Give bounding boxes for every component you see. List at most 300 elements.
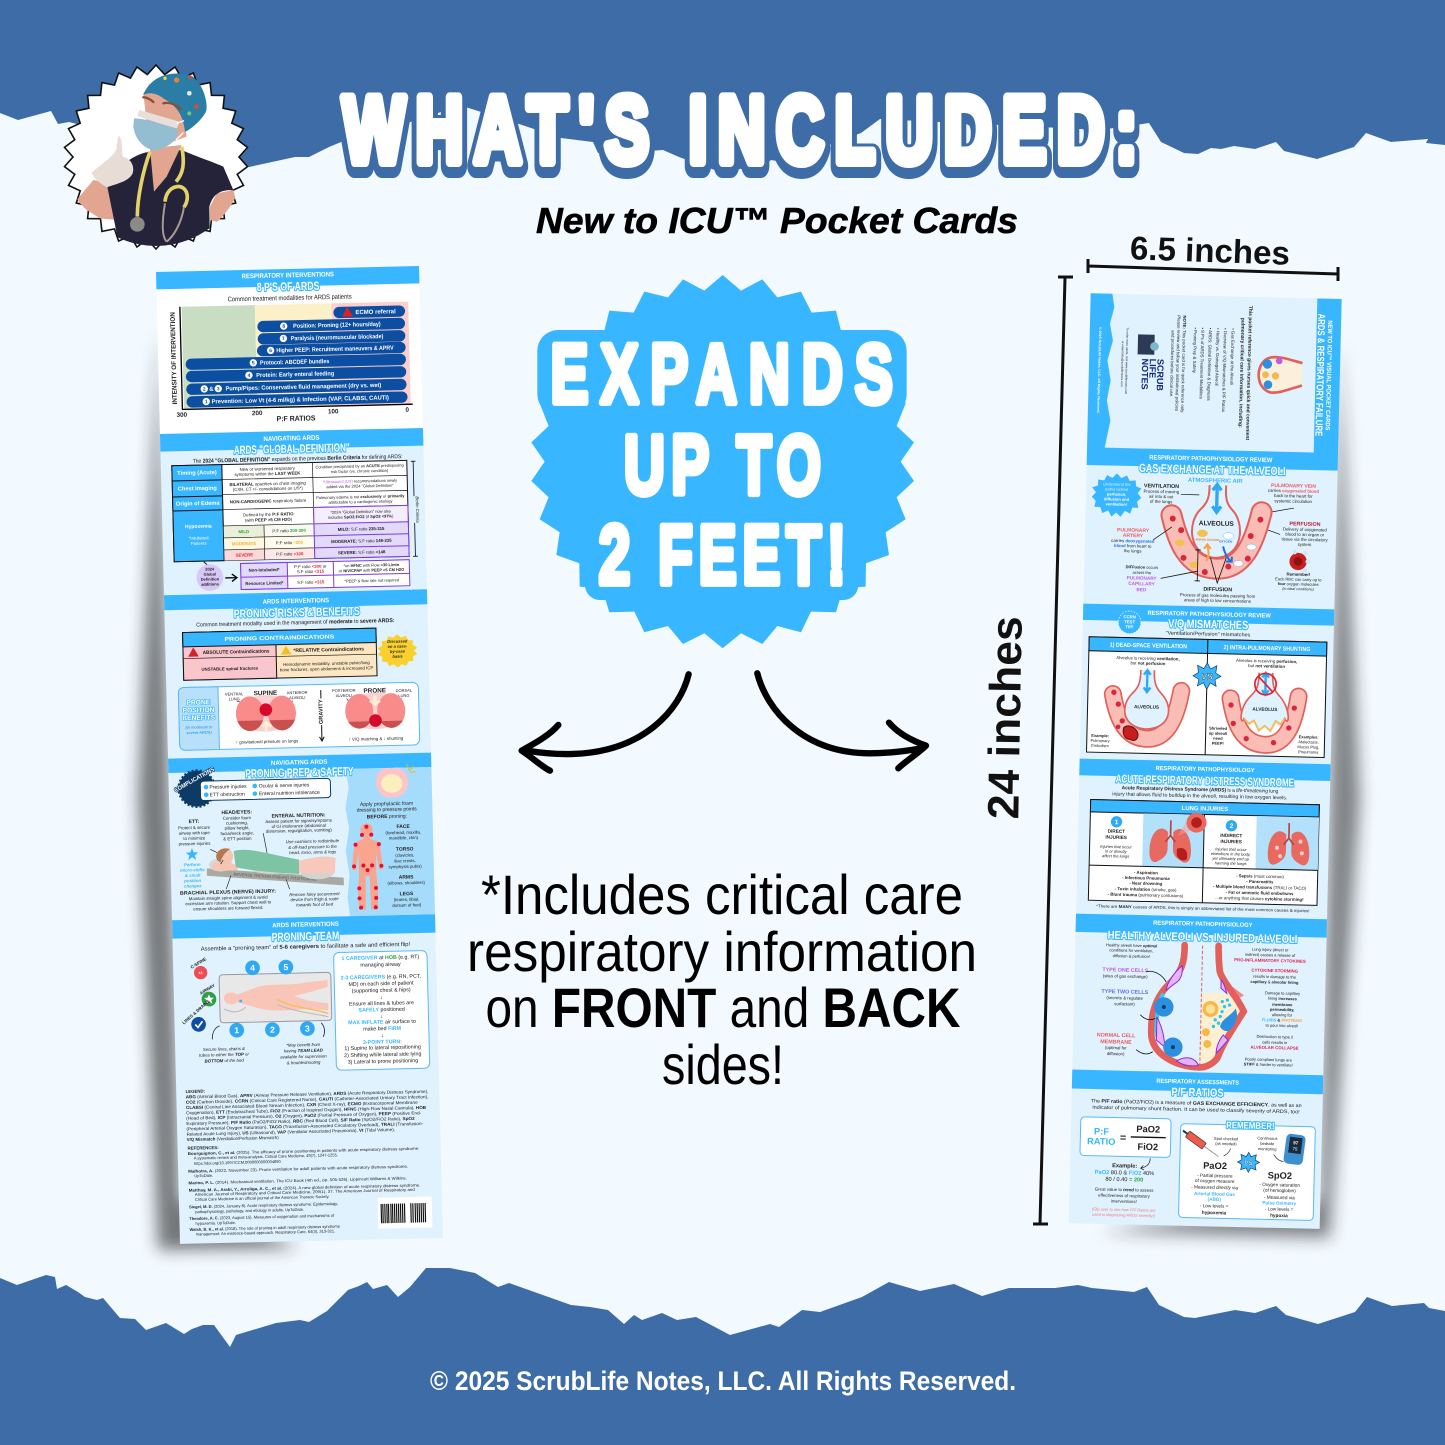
panel: proning prep and safety: ENTERAL NUTRITION: [272,812,326,820]
panel: V/Q mismatches: ALVEOLUS [1134,704,1159,710]
panel: proning prep and safety: Ocular & nerve injuries [259,782,310,790]
panel: ARDS global definition [160,428,427,592]
references text: Siegel, M. D. (2024, January 8). Acute respiratory distress syndrome: Epidemiology, [189,1201,338,1209]
panel: cover: NOTES [1139,358,1150,390]
torn blue footer background [0,1268,1445,1445]
panel: P/F ratios: REMEMBER! [1226,1120,1275,1131]
panel: P/F ratios: Continuous [1257,1135,1278,1141]
panel: healthy vs injured alveoli: conditions for ventilation, [1109,947,1154,953]
panel: proning risks and benefits: PRONING CONTRAINDICATIONS [224,634,335,643]
panel: healthy vs injured alveoli: Poorly compliant lungs are [1245,1056,1293,1063]
panel: V/Q mismatches: "Ventilation/Perfusion" mismatches [1166,630,1251,638]
panel: acute respiratory distress syndrome: - Toxin inhalation (smoke, gas) [1115,886,1177,893]
panel: proning team: 2 [270,1025,275,1035]
panel: V/Q mismatches: Alveolus is receiving ventilation, [1116,655,1180,661]
references text: Matthay, M. A., Arabi, Y., Arroliga, A. C., et al. (2024). A new global definition of acute respiratory distress syndrome. [189,1182,420,1193]
panel: proning team: managing airway [360,962,401,969]
panel: proning prep and safety: REVERSE TRENDELENBURG POSITIONING [233,872,317,882]
panel: V/Q mismatches: Embolism [1091,743,1109,748]
panel: P/F ratios: (as needed) [1215,1141,1237,1146]
panel: P/F ratios: 75 [1292,1146,1298,1152]
panel: proning prep and safety: mandible, chin) [389,835,419,841]
panel: P/F ratios: Great value to trend to assess [1095,1186,1154,1193]
panel: 8 P's of ARDS: Pump/Pipes: Conservative fluid management (dry vs. wet) [226,383,381,392]
panel: ARDS global definition: (with PEEP >5 CM H2O) [245,517,293,523]
panel: 8 P's of ARDS: 6 [269,348,272,354]
panel: proning team: & troubleshooting [287,1060,321,1065]
panel: healthy vs injured alveoli: lining increases [1268,996,1298,1001]
panel: gas exchange at the alveoli: DIFFusion occurs [1126,564,1158,570]
references text: Marino, P. L. (2014). Mechanical ventilation. The ICU Book (4th ed., pp. 505-526). Lippincott Williams & Wilkins. [188,1175,407,1185]
panel: gas exchange at the alveoli: RESPIRATORY PATHOPHYSIOLOGY REVIEW [1149,454,1272,464]
panel: acute respiratory distress syndrome: injury that allows fluid to buildup in the alveoli, resulting in low oxygen levels. [1112,791,1287,801]
callout: critical care information: respiratory information [467,920,977,983]
panel: proning risks and benefits: on a case- [387,643,408,649]
panel: cover: © 2025 ScrubLife Notes, LLC. All Rights Reserved. [1096,327,1102,414]
panel: acute respiratory distress syndrome: 1 [1115,819,1119,826]
panel: proning team: SAFELY positioned [358,1007,405,1014]
panel: acute respiratory distress syndrome [1076,759,1331,914]
panel: proning risks and benefits: ARDS INTERVENTIONS [263,597,329,606]
panel: ARDS global definition: *PEEP & flow rate not required [344,577,399,584]
barcode [378,1196,432,1229]
panel: proning prep and safety: FACE [396,824,411,830]
panel: ARDS global definition: Global [204,571,216,577]
panel: gas exchange at the alveoli: PULMONARY [1117,527,1150,534]
panel: V/Q mismatches [1080,604,1334,758]
panel: 8 P's of ARDS: 100 [328,408,339,415]
panel: gas exchange at the alveoli: ventilation! [1106,501,1127,507]
panel: proning team: 2) Shifting while lateral side lying [344,1051,422,1059]
panel: gas exchange at the alveoli [1089,453,1330,605]
panel: gas exchange at the alveoli: tissue via the circulatory [1281,536,1329,542]
panel: ARDS global definition: P:F ratio <200 [276,540,304,545]
panel: ARDS global definition: 2024 [205,566,215,572]
panel: gas exchange at the alveoli: areas of high to low concentrations [1184,597,1251,604]
panel: V/Q mismatches: VS [1201,671,1213,682]
panel: healthy vs injured alveoli: MEMBRANE [1100,1039,1132,1046]
panel: proning prep and safety: head, torso, arms & legs [289,849,337,855]
dimension: 24 inches: 24 inches [979,616,1032,820]
dimension: 6.5 inches [1088,229,1338,281]
panel: gas exchange at the alveoli: diffusion and [1104,496,1130,502]
panel: acute respiratory distress syndrome: INJURIES [1105,835,1127,840]
panel: ARDS global definition: The 2024 "GLOBAL DEFINITION" expands on the previous Berlin Criteria for defining ARDS: [193,454,403,465]
panel: ARDS global definition: P:F ratio <300 or [294,564,327,569]
panel: proning team: 3) Lateral to prone positioning [348,1058,418,1066]
panel: proning prep and safety: excessive arm rotation. Support chest wall to [185,899,272,906]
panel: P/F ratios: (Flip over to see how P/F Ratios are [1092,1206,1156,1213]
panel: ARDS global definition: P:F ratio <100 [276,551,304,557]
panel: healthy vs injured alveoli: capillary & alveolar lining [1250,979,1299,985]
panel: healthy vs injured alveoli: allowing for [1272,1012,1293,1018]
panel: proning prep and safety: (clavicles, [395,852,414,858]
legend text: (Peripheral Arterial Oxygen Saturation), TACO (Transfusion-Associated Circulatory Overload), TRALI (Transfusion- [186,1121,424,1131]
panel: proning team: 1 CAREGIVER at HOB (e.g. RT) [341,954,420,962]
panel: P/F ratios: FiO2 [1137,1142,1158,1152]
panel: proning prep and safety: Remove foley securement [289,891,340,897]
references text: Theodore, A. C. (2023, August 15). Measures of oxygenation and mechanisms of [189,1213,335,1221]
panel: 8 P's of ARDS: 8 [282,324,285,330]
panel: gas exchange at the alveoli: ATMOSPHERIC AIR [1188,478,1243,485]
panel: proning team: ↓ [380,1014,383,1020]
panel: P/F ratios: (of hemoglobin) [1263,1188,1296,1193]
panel: V/Q mismatches: TIP! [1125,624,1134,629]
panel: ARDS global definition: NON-CARDIOGENIC respiratory failure [230,498,307,504]
panel: proning risks and benefits: ALVEOLI [289,695,305,700]
panel: proning prep and safety: iliac crests, [394,858,416,864]
panel: healthy vs injured alveoli: membrane [1272,1002,1293,1007]
panel: V/Q mismatches: ALVEOLUS [1252,707,1277,712]
panel: proning prep and safety: LEGS [400,891,414,897]
panel: P/F ratios: SpO2 [1268,1170,1292,1181]
panel: proning team: LINES & DRAINS [181,998,211,1025]
panel: P/F ratios: interventions! [1111,1198,1137,1204]
panel: proning team: having TEAM LEAD [284,1048,323,1053]
panel: P/F ratios: - Measured directly via [1191,1184,1238,1190]
panel: healthy vs injured alveoli: to pour into alveoli [1265,1023,1298,1028]
legend text: CLABSI (Central Line Associated Blood Stream Infection), CXR (Chest X-ray), ECMO (Extracorporeal Membrane [186,1100,418,1110]
panel: P/F ratios: - Oxygen saturation [1259,1182,1300,1188]
panel: ARDS global definition: Timing (Acute) [177,470,217,477]
panel: proning prep and safety: Consider foam [223,815,251,821]
references text [188,1140,421,1237]
panel: gas exchange at the alveoli: VENTILATION [1144,483,1179,490]
title: WHAT'S INCLUDED: [343,79,1137,183]
panel: cover: or email hello@scrublifenotes.com [1120,341,1125,387]
panel: P/F ratios [1069,1070,1323,1222]
panel: V/Q mismatches: but not ventilation [1248,663,1285,669]
panel: P/F ratios: = [1120,1132,1126,1144]
panel: P/F ratios: bedside [1260,1141,1275,1146]
callout: critical care information: on FRONT and BACK [486,976,960,1039]
panel: 8 P's of ARDS: 200 [252,410,263,417]
panel: P/F ratios: - Partial pressure [1197,1173,1233,1179]
panel: cover: • 8 P's of ARDS Treatment Modalities [1199,327,1205,399]
panel: acute respiratory distress syndrome: - Infectious Pneumonia [1122,875,1170,881]
panel: proning risks and benefits: ANTERIOR [287,690,308,695]
references text: Malhotra, A. (2022, November 23). Prone ventilation for adult patients with acute respiratory distress syndrome. [188,1164,408,1174]
panel: gas exchange at the alveoli: systemic circulation [1274,498,1313,504]
panel: 8 P's of ARDS: & [209,387,214,393]
panel: proning prep and safety: Apply prophylactic foam [360,801,413,808]
panel: proning team: 3-POINT TURN: [363,1039,402,1046]
references text: pathophysiology, pathology, and etiology in adults. UpToDate. [195,1207,304,1214]
panel: P/F ratios: 80 / 0.40 = 200 [1105,1177,1143,1184]
panel: V/Q mismatches: CCRN [1123,614,1136,619]
panel: P/F ratios: hypoxemia [1202,1210,1227,1215]
panel: healthy vs injured alveoli: Destruction to type 2 [1256,1034,1294,1040]
panel: ARDS global definition: SEVERE [236,552,253,558]
panel: proning team: PRONING TEAM [271,929,339,944]
panel: 8 P's of ARDS: 2 [203,387,206,393]
panel: 8 P's of ARDS: Prevention: Low Vt (4-6 ml/kg) & Infection (VAP, CLABSI, CAUTI) [212,395,389,405]
panel: proning team: MAX INFLATE air surface to [348,1019,416,1026]
panel: proning team: (supporting chest & hips) [352,987,411,995]
panel: proning team: 1) Supine to lateral repositioning [344,1044,421,1052]
panel: cover [1087,293,1342,471]
legend text [186,1084,429,1142]
panel: cover: • ARDS: Global Definition & Diagnosis [1206,328,1213,401]
panel: gas exchange at the alveoli: the lungs [1124,548,1141,554]
panel: proning team: ↓ [381,1033,384,1039]
panel: proning team [172,914,443,1237]
panel: healthy vs injured alveoli: FLUIDS & PROTEINS [1262,1017,1302,1023]
panel: healthy vs injured alveoli: indirect) causes a release of [1245,952,1296,958]
panel: proning team: 2-3 CAREGIVERS (e.g. RN, PCT, [341,974,421,981]
legend text: CO2 (Carbon Dioxide), CCRN (Critical Care Registered Nurse), CAUTI (Catheter-Associated Urinary Tract Infection), [186,1094,429,1105]
panel: proning prep and safety: BEFORE proning: [367,814,407,820]
panel: V/Q mismatches: Pulmonary [1090,738,1110,743]
panel: proning team: +/- [198,970,204,975]
panel: proning prep and safety: Use cushions to redistribute [286,838,340,844]
panel: V/Q mismatches: but not perfusion [1130,660,1166,666]
panel: 8 P's of ARDS: Protocol: ABCDEF bundles [260,359,330,367]
callout: critical care information: sides! [662,1033,784,1096]
references text: Bourguignon, C., et al. (2025). The efficacy of prone positioning in patients with acute respiratory distress syndrome: [188,1146,419,1156]
panel: proning team: tubes to either the TOP or [199,1052,249,1058]
panel: V/Q mismatches: RESPIRATORY PATHOPHYSIOLOGY REVIEW [1147,611,1271,620]
panel: proning prep and safety: NAVIGATING ARDS [271,759,328,767]
panel: cover: and procedures before clinical use. [1169,330,1176,397]
panel: ARDS global definition: Non-Intubated* [249,567,280,573]
panel: ARDS global definition: additions [201,581,220,587]
panel: gas exchange at the alveoli: back to the heart for [1274,493,1313,499]
panel: P/F ratios: hypoxia [1270,1213,1288,1218]
torn blue header background [0,0,1445,174]
panel: V/Q mismatches: Mucus Plug, [1297,744,1319,750]
panel: acute respiratory distress syndrome: ACUTE RESPIRATORY DISTRESS SYNDROME [1116,773,1294,789]
panel: ARDS global definition: or NIV/CPAP with PEEP >5 CM H2O [339,567,404,573]
panel: healthy vs injured alveoli: TYPE TWO CELLS [1101,989,1149,996]
panel: proning prep and safety: & ETT position [223,836,252,841]
panel: 8 P's of ARDS: INTENSITY OF INTERVENTION [170,312,179,405]
panel: proning risks and benefits: ↑ gravitational pressure on lungs [236,738,298,745]
panel: cover: NOTE: This pocket card is for quick reference only. [1180,315,1187,413]
panel: proning prep and safety: facial/neck angle, [220,830,254,836]
nurse badge [64,65,248,250]
panel: cover: LIFE [1147,359,1158,378]
subtitle: New to ICU™ Pocket Cards [536,200,1018,241]
panel: ARDS global definition: *2024 "Global Definition" now also [330,508,392,515]
callout: critical care information: *Includes critical care [481,863,963,926]
legend text: LEGEND: [186,1089,206,1094]
panel: proning team: available for supervision [280,1053,327,1060]
panel: proning prep and safety: TORSO [396,846,414,853]
panel: gas exchange at the alveoli: Each RBC can carry up to [1275,576,1322,582]
panel: P/F ratios: - Low levels = [1265,1206,1294,1212]
panel: proning prep and safety: Protect & secure [178,825,211,830]
panel: healthy vs injured alveoli: permeability, [1270,1007,1294,1012]
legend text: Oxygenation), ETT (Endotracheal Tube), FiO2 (Fraction of Inspired Oxygen), HFNC (High-Flow Nasal Cannula), HOB [186,1105,426,1115]
panel: proning prep and safety [168,753,435,920]
panel: 8 P's of ARDS [156,266,423,434]
panel: cover: • Proning Prep & Safety [1192,327,1198,374]
panel: proning risks and benefits: Discussed [387,638,408,644]
panel: acute respiratory distress syndrome: in or directly [1105,849,1128,854]
panel: ARDS global definition: BILATERAL opacities on chest imaging [229,480,306,487]
callout: critical care information [467,863,977,1096]
panel: proning team: Ensure all lines & tubes are [349,1000,414,1008]
panel: ARDS global definition: Condition precipitated by an ACUTE predisposing [315,462,404,469]
panel: proning prep and safety: micro-shifts [180,867,205,873]
panel: proning risks and benefits: PRONE [363,687,386,695]
panel: proning prep and safety: & off-load pressure to the [288,844,338,850]
panel: proning prep and safety: dressing to pressure points [357,806,417,814]
panel: proning prep and safety: ARMS [399,874,414,881]
panel: acute respiratory distress syndrome: - Pancreatitis [1246,879,1274,884]
panel: acute respiratory distress syndrome: INJURIES [1220,839,1242,844]
panel: acute respiratory distress syndrome: - Multiple blood transfusions (TRALI or TACO) [1213,884,1307,891]
panel: acute respiratory distress syndrome: LUNG INJURIES [1181,806,1228,813]
panel: 8 P's of ARDS: Position: Proning (12+ hours/day) [293,322,381,330]
panel: proning prep and safety: to minimize [183,835,206,841]
panel: P/F ratios: RESPIRATORY ASSESSMENTS [1156,1079,1239,1087]
panel: V/Q mismatches: Shriveled [1209,726,1228,731]
panel: healthy vs injured alveoli: CYTOKINE STORMING [1251,968,1299,974]
panel: ARDS global definition: Pulmonary edema is not exclusively or primarily [316,493,405,500]
panel: gas exchange at the alveoli: Remember! [1286,572,1311,577]
panel: proning team: ↓ [380,995,383,1001]
legend text: (Head of Bed), ICP (Intracranial Pressure), O2 (Oxygen), PaO2 (Partial Pressure of Oxygen), PEEP (Positive End- [186,1110,422,1121]
panel: gas exchange at the alveoli: four oxygen molecules [1278,581,1319,587]
panel: proning team: make bed FIRM [363,1026,402,1033]
panel: ARDS global definition: Chest Imaging [178,486,217,493]
panel: gas exchange at the alveoli: Process of gas molecules passing from [1180,592,1256,599]
panel: gas exchange at the alveoli: of the lungs [1150,499,1172,504]
right card shadow [1100,340,1360,1238]
panel: V/Q mismatches: PEEP! [1212,741,1224,746]
panel: P/F ratios: P:F [1094,1126,1109,1137]
panel: ARDS global definition: Patients [191,541,207,546]
panel: healthy vs injured alveoli: diffusion) [1107,1051,1125,1056]
panel: proning prep and safety: PRONING PREP & SAFETY [245,765,354,781]
panel: ARDS global definition: NAVIGATING ARDS [263,435,320,443]
panel: proning risks and benefits: ABSOLUTE Contraindications [203,649,270,656]
title: WHAT'S INCLUDED: [343,83,1137,187]
panel: proning risks and benefits: PRONING RISKS & BENEFITS [234,605,360,621]
panel: proning prep and safety: ensure shoulders are forward flexed. [193,905,264,911]
panel: proning risks and benefits: ↑ V/Q matching & ↓ shunting [349,736,404,742]
references text: REFERENCES: [188,1145,219,1151]
panel: healthy vs injured alveoli: surfactant) [1114,1001,1135,1007]
panel: V/Q mismatches: Example: [1091,733,1109,738]
panel: gas exchange at the alveoli: system [1298,542,1312,547]
panel: gas exchange at the alveoli: CAPILLARY [1128,581,1156,587]
panel: proning risks and benefits: DORSAL [395,688,413,693]
panel: P/F ratios: 97 [1293,1140,1299,1146]
references text: UpToDate. [194,1173,213,1178]
panel: ARDS global definition: Origin of Edema [176,501,221,508]
panel: V/Q mismatches: Atelectasis, [1298,739,1319,745]
panel: gas exchange at the alveoli: air into & out [1149,494,1174,499]
panel: healthy vs injured alveoli: cells results in [1262,1040,1287,1045]
panel: 8 P's of ARDS: 7 [282,336,285,342]
panel: ARDS global definition: Berlin Criteria [415,496,420,523]
panel: acute respiratory distress syndrome: - Blunt trauma (pulmonary contusions) [1108,892,1184,898]
panel: cover: • Gas Exchange at the Alveoli [1229,328,1236,385]
left card shadow [138,330,300,1250]
panel: P/F ratios: effectiveness of respiratory [1098,1193,1151,1199]
panel: proning prep and safety: Enteral nutrition intolerance [259,790,320,797]
panel: acute respiratory distress syndrome: *There are MANY causes of ARDS, this is simply an abbreviated list of the most common causes & injuries! [1096,903,1310,913]
panel: acute respiratory distress syndrome: - Near drowning [1129,880,1163,886]
footer copyright: © 2025 ScrubLife Notes, LLC. All Rights Reserved. [430,1366,1016,1396]
panel: gas exchange at the alveoli: ARTERY [1123,533,1144,539]
panel: cover: • Healthy vs. Damaged Alveoli [1214,328,1221,386]
panel: proning prep and safety: (forehead, maxilla, [385,830,421,835]
panel: P/F ratios: Example: [1112,1163,1137,1170]
panel: gas exchange at the alveoli: blood to an organ or [1285,532,1325,537]
panel: proning risks and benefits [164,589,431,751]
panel: proning prep and safety: airway with tape [179,830,210,836]
panel: gas exchange at the alveoli: GAS EXCHANGE AT THE ALVEOLI [1139,462,1286,478]
panel: proning risks and benefits: POSITION [183,707,215,715]
legend text: Expiratory Pressure), P/F Ratio (PaO2/FiO2 Ratio), RBC (Red Blood Cell), S/F Ratio (SpO2/FiO2 Ratio), SpO2 [186,1116,415,1126]
panel: acute respiratory distress syndrome: RESPIRATORY PATHOPHYSIOLOGY [1156,766,1255,774]
panel: proning prep and safety: dorsum of feet) [392,902,422,908]
panel: proning prep and safety: device from thigh & route [290,896,339,902]
panel: proning risks and benefits: by-case [390,648,406,654]
panel: healthy vs injured alveoli: ALVEOLAR COLLAPSE [1250,1045,1299,1051]
panel: healthy vs injured alveoli [1072,914,1327,1070]
panel: V/Q mismatches: Examples: [1299,734,1319,740]
panel: proning risks and benefits: UNSTABLE spinal fractures [201,666,259,672]
panel: proning risks and benefits: Common treatment modality used in the management of moderate to severe ARDS: [196,618,395,629]
panel: proning team: 1 [234,1025,239,1035]
panel: ARDS global definition: attributable to a cardiogenic etiology [328,498,393,505]
panel: proning prep and safety: of GI intolerance (abdominal [271,823,326,829]
panel: gas exchange at the alveoli: OXYGEN [1219,539,1232,544]
panel: healthy vs injured alveoli: Healthy alveoli have optimal [1106,942,1158,948]
references text: hypoxemia. UpToDate. [195,1220,236,1226]
panel: proning risks and benefits: basis [392,654,404,659]
panel: cover: ARDS & RESPIRATORY FAILURE [1312,313,1326,437]
panel: acute respiratory distress syndrome: Injuries that occur [1100,844,1132,849]
panel: acute respiratory distress syndrome: affect the lungs [1102,853,1129,859]
panel: P/F ratios: P/F RATIOS [1171,1086,1224,1100]
panel: proning team: C-SPINE [190,956,207,970]
panel: proning team: *May benefit from [286,1042,321,1048]
panel: gas exchange at the alveoli: DIFFUSION [1203,587,1232,593]
panel: proning prep and safety: changes [184,883,202,889]
panel: ARDS global definition: *on HFNC with Flow >30 L/min [343,562,400,568]
panel: P/F ratios: The P/F ratio (PaO2/FiO2) is a measure of GAS EXCHANGE EFFICIENCY, as well as an [1091,1098,1302,1109]
panel: ARDS global definition: MILD [238,529,249,534]
panel: acute respiratory distress syndrome: elsewhere in the body, [1211,851,1251,857]
panel: ARDS global definition: Definition [201,576,220,582]
panel: gas exchange at the alveoli: Delivery of oxygenated [1283,526,1328,532]
panel: healthy vs injured alveoli: Damage to capillary [1265,990,1300,996]
panel: proning risks and benefits: LUNG [398,693,410,698]
panel: gas exchange at the alveoli: ALVEOLUS [1199,520,1234,528]
panel: P/F ratios: - Measured via [1264,1195,1295,1200]
panel: cover: This pocket reference gives nurses quick and convenient [1244,306,1253,440]
panel: gas exchange at the alveoli: PERFUSION [1289,521,1321,528]
panel: P/F ratios: PaO2 [1203,1161,1227,1171]
panel: ARDS global definition: MODERATE [232,541,256,546]
panel: proning team: MD) on each side of patient [348,980,414,988]
panel: proning prep and safety: & small [185,873,201,878]
panel: ARDS global definition: includes SpO2:FiO2 (if SpO2 <97%) [328,513,394,520]
panel: 8 P's of ARDS: P:F RATIOS [276,413,316,423]
dimension: 24 inches [979,277,1073,1224]
panel: proning team: ARDS INTERVENTIONS [272,921,339,929]
panel: healthy vs injured alveoli: results in damage to the [1253,974,1297,980]
panel: proning risks and benefits: bone fractures, open abdomens & increased ICP [280,665,373,672]
panel: ARDS global definition: MODERATE: S:F ratio 148-235 [331,538,392,544]
panel: proning prep and safety: Maintain straight spine alignment & avoid [189,894,268,901]
